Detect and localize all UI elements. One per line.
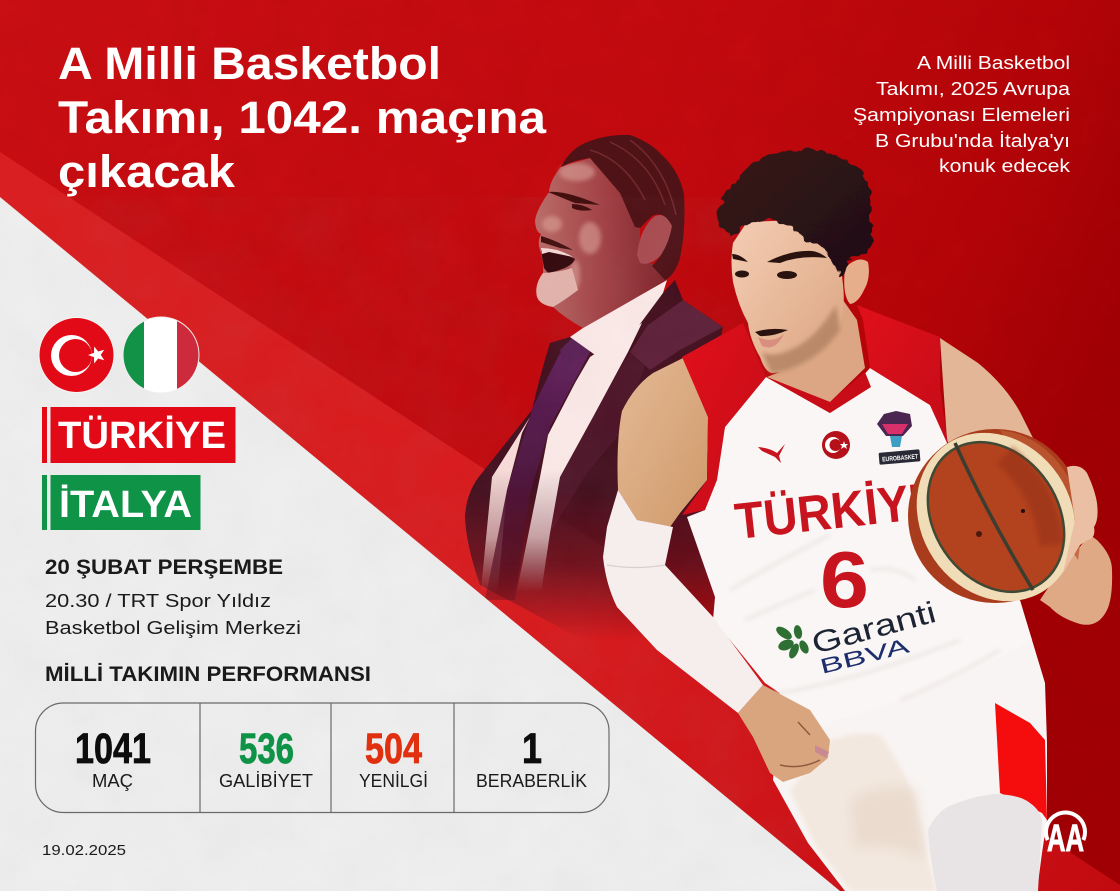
arm sleeve	[603, 490, 763, 713]
jersey print: Garanti BBVA: Garanti	[808, 596, 939, 661]
stat: losses: 504	[365, 725, 422, 773]
jersey print: TÜRKİYE: TÜRKİYE	[732, 471, 943, 550]
summary text	[853, 52, 1071, 176]
title: çıkacak	[58, 146, 236, 197]
summary text: B Grubu'nda İtalya'yı	[875, 130, 1070, 151]
coach neck and face	[535, 158, 667, 328]
right jersey strap	[857, 305, 948, 445]
stat: wins: 536	[239, 725, 294, 773]
stat: losses	[359, 725, 428, 791]
jersey green clover logo	[774, 624, 811, 660]
shorts left thigh shading	[790, 733, 937, 891]
summary text: Takımı, 2025 Avrupa	[876, 78, 1071, 99]
player hair	[717, 150, 872, 278]
summary text: Şampiyonası Elemeleri	[853, 104, 1070, 125]
coach shirt	[480, 323, 642, 600]
coach necktie	[485, 352, 590, 600]
performance heading: MİLLİ TAKIMIN PERFORMANSI	[45, 663, 371, 686]
coach hair streaks	[590, 140, 676, 215]
label: TÜRKİYE: TÜRKİYE	[58, 414, 226, 457]
jersey print: Garanti BBVA	[808, 596, 939, 679]
summary text: A Milli Basketbol	[917, 52, 1070, 73]
EuroBasket badge	[877, 411, 920, 465]
shorts side stripe	[995, 703, 1047, 820]
jersey puma mark	[758, 444, 785, 463]
fist	[738, 685, 830, 782]
player mouth and eyes	[732, 251, 827, 336]
AA logo: AA	[1047, 818, 1084, 860]
title: Takımı, 1042. maçına	[58, 92, 547, 143]
leg	[928, 794, 1042, 891]
summary text: konuk edecek	[939, 155, 1071, 176]
left jersey strap and armhole	[682, 323, 766, 515]
stat: draws: 1	[522, 725, 542, 773]
player lower lip	[758, 334, 784, 348]
coach suit	[465, 280, 723, 650]
player stubble	[762, 305, 840, 373]
jersey collar	[766, 372, 871, 413]
stat: losses: YENİLGİ	[359, 771, 428, 791]
EuroBasket badge: EUROBASKET	[882, 453, 918, 464]
title	[58, 38, 547, 197]
coach brow and eye	[541, 192, 600, 250]
stat: draws	[476, 725, 587, 791]
jersey print: number 6: 6	[820, 535, 869, 624]
publication date: 19.02.2025	[42, 843, 126, 859]
coach mouth	[541, 250, 575, 273]
stat: wins	[219, 725, 313, 791]
stat: matches: 1041	[75, 725, 151, 773]
coach collar	[570, 280, 667, 357]
performance table	[36, 703, 609, 812]
coach hair	[561, 135, 684, 280]
basketball	[885, 402, 1107, 632]
title: A Milli Basketbol	[58, 38, 441, 89]
AA logo	[1046, 813, 1085, 860]
shorts	[773, 600, 1047, 891]
player figure	[603, 150, 1112, 891]
player face	[732, 220, 844, 373]
stat: matches: MAÇ	[92, 771, 133, 791]
match date: 20 ŞUBAT PERŞEMBE	[45, 556, 283, 579]
stat: wins: GALİBİYET	[219, 771, 313, 791]
stat: draws: BERABERLİK	[476, 771, 587, 791]
match details: Basketbol Gelişim Merkezi	[45, 617, 301, 638]
jersey body	[687, 368, 1032, 725]
jersey flag badge	[822, 431, 850, 459]
label: TÜRKİYE	[42, 407, 236, 463]
match details: 20.30 / TRT Spor Yıldız	[45, 590, 271, 611]
fingers on ball	[1063, 466, 1098, 573]
label: İTALYA: İTALYA	[59, 484, 192, 526]
player ear	[844, 260, 869, 304]
right upper arm	[940, 338, 1034, 470]
forearm	[1040, 535, 1112, 625]
flag: İtalya	[122, 316, 200, 392]
player neck	[767, 300, 865, 402]
coach face highlights	[542, 163, 601, 290]
coach ear	[637, 215, 673, 264]
flag: Türkiye	[38, 317, 114, 393]
left shoulder	[618, 358, 708, 527]
coach tie knot	[560, 333, 590, 372]
coach figure	[465, 135, 723, 650]
stat: matches	[75, 725, 151, 791]
match details	[45, 590, 301, 638]
jersey folds	[730, 535, 1000, 700]
white paper triangle	[0, 197, 840, 891]
jersey print: Garanti BBVA: BBVA	[818, 635, 912, 679]
coach chin beard	[536, 268, 578, 307]
label: İTALYA	[42, 475, 200, 530]
